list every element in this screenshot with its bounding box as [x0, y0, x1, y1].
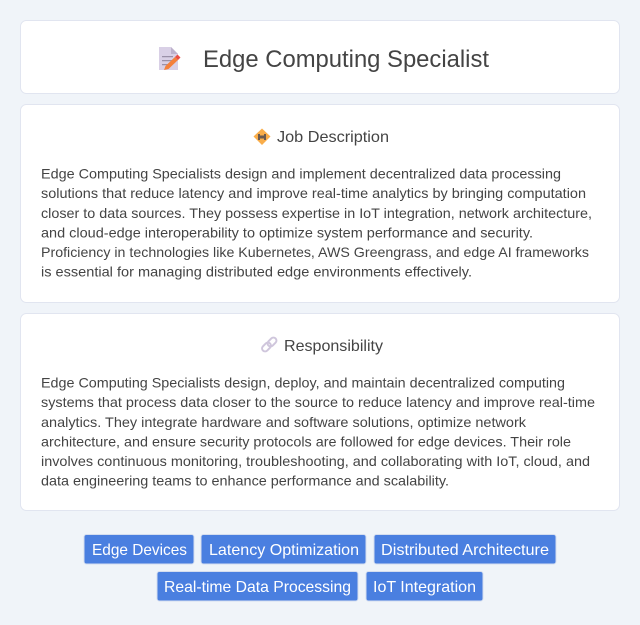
heading: responsibility: Responsibility	[284, 338, 383, 355]
text: responsibility body: Edge Computing Specialists design, deploy, and maintain decentralized computing	[41, 375, 565, 391]
panel: responsibility	[20, 314, 620, 510]
icon: chain link	[261, 336, 278, 353]
tag: edge devices	[84, 534, 194, 564]
text: responsibility body: systems that process data closer to the source to reduce latency and improve real-time	[41, 394, 595, 410]
text: responsibility body: analytics. They integrate hardware and software solutions, optimize network	[41, 414, 527, 430]
text: responsibility body: data engineering teams to enhance performance and scalability.	[41, 472, 449, 488]
tag: iot integration: IoT Integration	[373, 579, 476, 596]
tag: edge devices: Edge Devices	[92, 542, 187, 559]
tag: real-time data processing	[157, 572, 358, 601]
text: responsibility body: involves continuous monitoring, troubleshooting, and collaborating with IoT, cloud, and	[41, 453, 590, 469]
text: job description body: Proficiency in technologies like Kubernetes, AWS Greengrass, and edge AI frameworks	[41, 244, 589, 260]
text: job description body: and cloud-edge interoperability to optimize system performance and security.	[41, 224, 533, 240]
tag: latency optimization	[201, 534, 366, 564]
tag: real-time data processing: Real-time Data Processing	[164, 579, 351, 596]
icon: document with pencil	[159, 47, 180, 70]
title text: Edge Computing Specialist	[203, 46, 489, 73]
panel: job description	[20, 104, 620, 302]
tags	[84, 534, 556, 601]
text: job description body: closer to data sources. They possess expertise in IoT integration, network architecture,	[41, 205, 592, 221]
tag: distributed architecture: Distributed Architecture	[381, 542, 549, 559]
text: job description body: solutions that reduce latency and improve real-time analytics by bringing computation	[41, 185, 586, 201]
text: job description body: is essential for managing distributed edge environments effectively.	[41, 264, 472, 280]
text: job description body	[41, 166, 592, 280]
icon: puzzle diamond	[254, 128, 270, 145]
panel: title	[20, 20, 620, 94]
tag: latency optimization: Latency Optimization	[209, 542, 359, 559]
heading: job description: Job Description	[277, 129, 389, 146]
tag: distributed architecture	[374, 534, 556, 564]
text: job description body: Edge Computing Specialists design and implement decentralized data processing	[41, 166, 561, 182]
text: responsibility body: architecture, and ensure security protocols are followed for edge devices. Their role	[41, 433, 571, 449]
tag: iot integration	[366, 572, 483, 601]
text: responsibility body	[41, 375, 595, 488]
